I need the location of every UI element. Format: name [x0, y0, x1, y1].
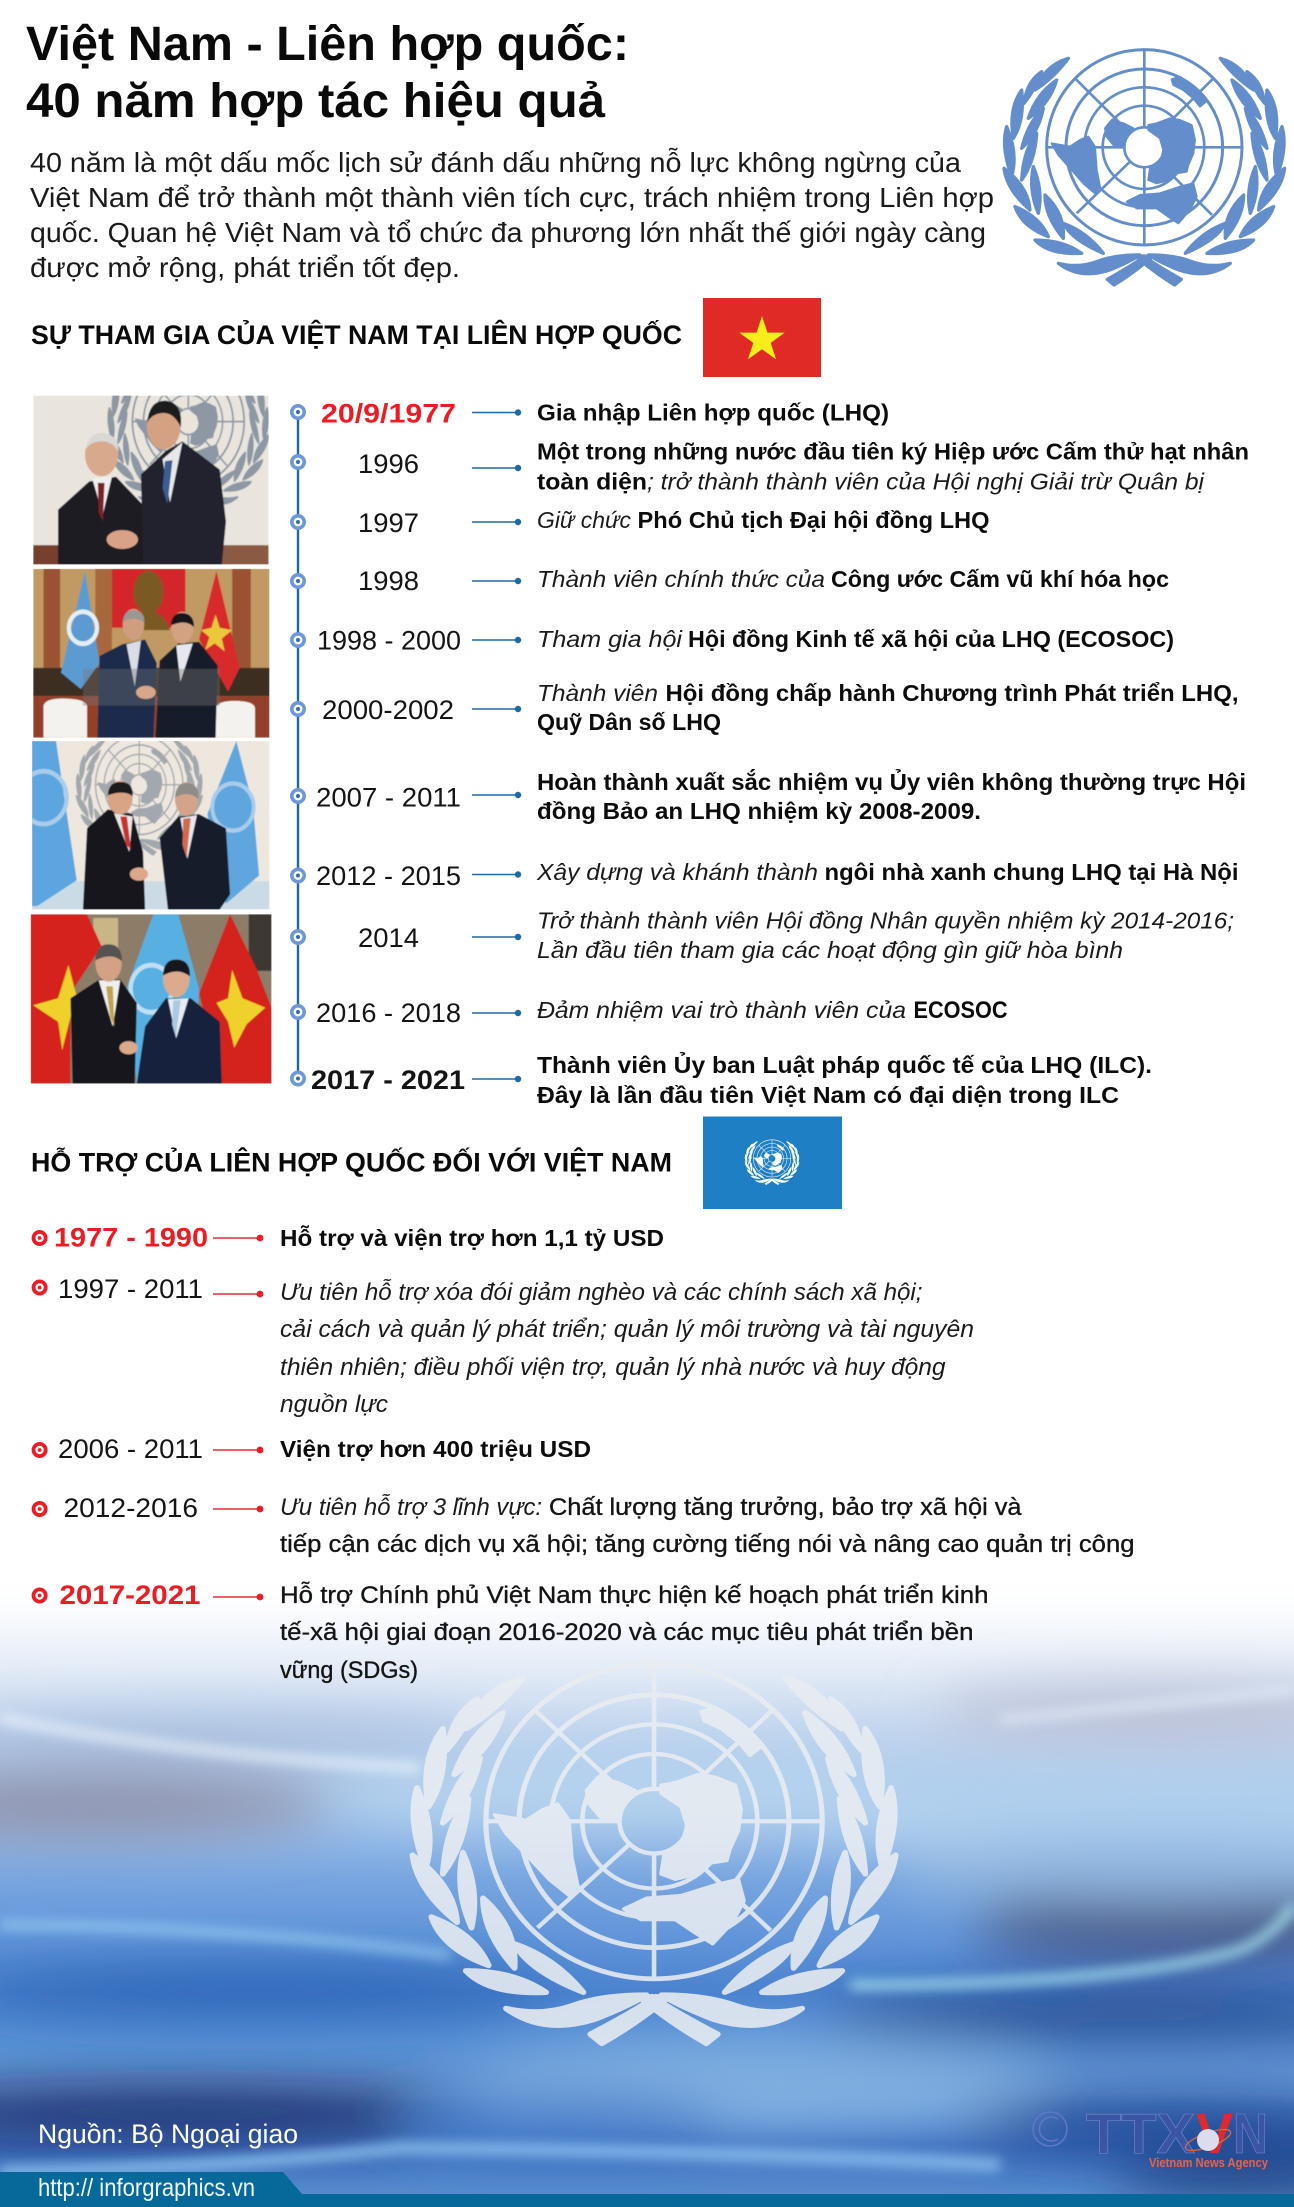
logo: TTXVN: V [1196, 2102, 1233, 2166]
logo: TTXVN: Vietnam News Agency [1149, 2155, 1269, 2170]
timeline descriptions: Thành viên chính thức của [537, 566, 825, 592]
timeline years: 1996 [358, 449, 419, 479]
timeline years: 2012 - 2015 [316, 861, 461, 891]
photo 3: handshake between UN flags [20, 735, 269, 909]
intro paragraph [30, 147, 994, 283]
background: blue silk waves [0, 1580, 1294, 2207]
timeline axis [297, 412, 299, 1078]
logo: TTXVN: TTX [1086, 2102, 1195, 2166]
timeline descriptions: Đảm nhiệm vai trò thành viên của [537, 997, 906, 1023]
support rows: descriptions: Hỗ trợ và viện trợ hơn 1,1 tỷ USD [280, 1224, 664, 1251]
support rows: descriptions [280, 1224, 1134, 1684]
support rows: descriptions: tiếp cận các dịch vụ xã hội; tăng cường tiếng nói và nâng cao quản trị công [280, 1531, 1134, 1558]
timeline descriptions [536, 400, 1249, 1108]
timeline years: 2016 - 2018 [316, 998, 461, 1028]
timeline descriptions: Đây là lần đầu tiên Việt Nam có đại diện trong ILC [537, 1082, 1119, 1108]
timeline years: 1998 [358, 566, 419, 596]
heading: UN support for Vietnam: HỖ TRỢ CỦA LIÊN HỢP QUỐC ĐỐI VỚI VIỆT NAM [31, 1146, 672, 1178]
timeline descriptions: Tham gia hội [537, 626, 683, 652]
icon: UN emblem [1004, 50, 1285, 285]
icon: Vietnam flag [703, 298, 821, 377]
support rows: descriptions: Chất lượng tăng trưởng, bảo trợ xã hội và [549, 1494, 1022, 1521]
timeline descriptions: Một trong những nước đầu tiên ký Hiệp ước Cấm thử hạt nhân [537, 438, 1249, 464]
intro paragraph: quốc. Quan hệ Việt Nam và tổ chức đa phương lớn nhất thế giới ngày càng [30, 217, 986, 248]
photo 1: handshake before UN emblem [33, 396, 269, 564]
timeline connectors [472, 409, 521, 1082]
timeline descriptions: Lần đầu tiên tham gia các hoạt động gìn giữ hòa bình [537, 937, 1123, 963]
timeline years: 2007 - 2011 [316, 782, 461, 812]
support rows: descriptions: Ưu tiên hỗ trợ 3 lĩnh vực: [280, 1493, 542, 1521]
support rows: descriptions: nguồn lực [280, 1391, 388, 1418]
timeline descriptions: Công ước Cấm vũ khí hóa học [831, 566, 1169, 592]
background emblem: UN seal [412, 1664, 896, 2043]
footer bar [0, 2172, 1294, 2207]
support rows: descriptions: cải cách và quản lý phát triển; quản lý môi trường và tài nguyên [280, 1316, 974, 1343]
timeline descriptions: toàn diện [537, 468, 647, 494]
timeline descriptions: ; trở thành thành viên của Hội nghị Giải trừ Quân bị [647, 468, 1205, 494]
timeline nodes [290, 404, 306, 1086]
title: 40 năm hợp tác hiệu quả [26, 75, 605, 128]
support rows: descriptions: Ưu tiên hỗ trợ xóa đói giảm nghèo và các chính sách xã hội; [280, 1278, 922, 1306]
photo 2: meeting with bust and flags [33, 569, 269, 738]
timeline years: 2017 - 2021 [311, 1065, 465, 1095]
intro paragraph: Việt Nam để trở thành một thành viên tích cực, trách nhiệm trong Liên hợp [30, 182, 994, 213]
timeline years [311, 398, 465, 1095]
support rows: years: 2006 - 2011 [58, 1434, 203, 1464]
timeline years: 2014 [358, 923, 419, 953]
support rows: years [54, 1222, 208, 1610]
title: Việt Nam - Liên hợp quốc: [26, 18, 629, 71]
timeline years: 1997 [358, 508, 419, 538]
website url: http:// inforgraphics.vn [38, 2174, 255, 2202]
timeline descriptions: đồng Bảo an LHQ nhiệm kỳ 2008-2009. [537, 798, 981, 824]
intro paragraph: được mở rộng, phát triển tốt đẹp. [30, 252, 460, 283]
timeline descriptions: Quỹ Dân số LHQ [537, 709, 721, 735]
timeline descriptions: Hội đồng chấp hành Chương trình Phát triển LHQ, [666, 680, 1238, 706]
timeline descriptions: Phó Chủ tịch Đại hội đồng LHQ [638, 507, 990, 533]
timeline descriptions: Hoàn thành xuất sắc nhiệm vụ Ủy viên không thường trực Hội [537, 767, 1246, 795]
support rows: markers and arrows [32, 1230, 263, 1604]
timeline descriptions: Thành viên Ủy ban Luật pháp quốc tế của LHQ (ILC). [537, 1050, 1152, 1078]
support rows: descriptions: vững (SDGs) [280, 1657, 418, 1684]
intro paragraph: 40 năm là một dấu mốc lịch sử đánh dấu những nỗ lực không ngừng của [30, 147, 961, 178]
timeline years: 2000-2002 [322, 695, 454, 725]
timeline years: 1998 - 2000 [317, 626, 461, 656]
timeline descriptions: Trở thành thành viên Hội đồng Nhân quyền nhiệm kỳ 2014-2016; [537, 908, 1234, 934]
logo: TTXVN: N [1233, 2102, 1268, 2166]
support rows: years: 1977 - 1990 [54, 1222, 208, 1252]
photo 4: handshake with Vietnam and UN flags [31, 914, 272, 1084]
support rows: years: 2017-2021 [60, 1580, 200, 1610]
timeline descriptions: ECOSOC [914, 997, 1008, 1024]
logo: TTXVN [1033, 2102, 1269, 2170]
support rows: years: 1997 - 2011 [58, 1274, 203, 1304]
timeline descriptions: Thành viên [537, 680, 658, 706]
timeline years: 20/9/1977 [321, 398, 456, 428]
timeline descriptions: Gia nhập Liên hợp quốc (LHQ) [537, 400, 889, 426]
timeline descriptions: Xây dựng và khánh thành [536, 859, 818, 885]
support rows: descriptions: tế-xã hội giai đoạn 2016-2020 và các mục tiêu phát triển bền [280, 1619, 974, 1646]
support rows: descriptions: Hỗ trợ Chính phủ Việt Nam thực hiện kế hoạch phát triển kinh [280, 1582, 988, 1609]
heading: Vietnam's participation at the UN: SỰ THAM GIA CỦA VIỆT NAM TẠI LIÊN HỢP QUỐC [31, 318, 682, 350]
timeline descriptions: Hội đồng Kinh tế xã hội của LHQ (ECOSOC) [688, 626, 1174, 652]
support rows: descriptions: thiên nhiên; điều phối viện trợ, quản lý nhà nước và huy động [280, 1354, 946, 1381]
support rows: descriptions: Viện trợ hơn 400 triệu USD [280, 1436, 591, 1462]
title [26, 18, 629, 128]
source credit: Nguồn: Bộ Ngoại giao [38, 2119, 298, 2149]
support rows: years: 2012-2016 [64, 1493, 198, 1523]
timeline descriptions: Giữ chức [537, 507, 631, 533]
timeline descriptions: ngôi nhà xanh chung LHQ tại Hà Nội [824, 859, 1238, 885]
icon: UN flag [703, 1116, 842, 1209]
